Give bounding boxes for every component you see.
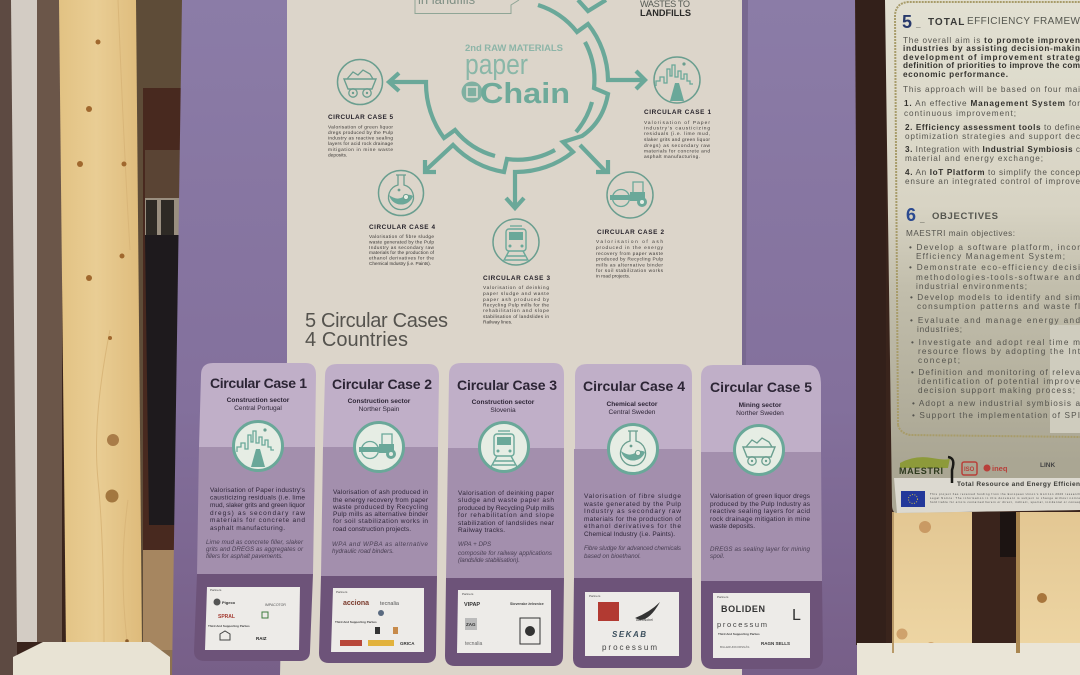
wastes to landfills label: [640, 0, 691, 18]
panel: circular case 4 card: Valorisation of fibre sludge: [584, 493, 681, 500]
central logo: 2nd raw materials paper chain: [462, 43, 570, 110]
panel: circular case 1 card: RAIZ: [256, 636, 267, 641]
panel: circular case 1 card: [194, 363, 316, 661]
circular case 5 node: [328, 60, 393, 158]
panel: circular case 5 card: BOLIDEN: [721, 604, 765, 614]
footer strap line and EU flag: Legal Notice: The information in this document is subject to change without notice: [930, 496, 1080, 500]
circular case 2 node: CIRCULAR CASE 2: [597, 229, 664, 236]
circular case 4 node: Chemical Industry (i.e. Paints).: [369, 261, 431, 267]
panel: circular case 3 card: stabilization of landslides near: [458, 520, 555, 527]
panel: circular case 1 card: asphalt manufacturing.: [210, 525, 285, 532]
circular case 5 node: layers for acid rock drainage: [328, 141, 393, 147]
poster central cream panel: [280, 0, 745, 675]
panel edge shadow: [742, 0, 748, 365]
circular case 3 node: Recycling Pulp mills for the: [483, 302, 549, 308]
framework text: 4. An IoT Platform to simplify the concep: [905, 168, 1080, 177]
circular case 2 node: mills as alternative binder: [596, 262, 663, 268]
circular case 5 node: dregs produced by the Pulp: [328, 130, 393, 136]
panel: circular case 4 card: based on bioethanol.: [584, 553, 641, 560]
objectives list: • Support the implementation of SPI: [912, 411, 1080, 420]
panel: circular case 4 card: Chemical Industry (i.e. Paints).: [584, 531, 675, 538]
panel: circular case 3 card: ZAG: [466, 622, 476, 627]
panel: circular case 5 card: reactive sealing layers for acid: [710, 508, 810, 515]
panel: circular case 1 card: Valorisation of Paper industry's: [210, 487, 306, 494]
circular case 3 node: Railway lines.: [483, 320, 512, 326]
footer strap line and EU flag: This project has received funding from the European Union's Horizon 2020 research: [930, 492, 1080, 496]
panel: circular case 1 card: SPRAL: [218, 614, 235, 620]
objectives list: methodologies-tools-software and: [916, 273, 1080, 282]
objectives list: [906, 229, 1080, 420]
panel: circular case 4 card: processum: [602, 643, 657, 652]
panel: circular case 3 card: Slovenia: [490, 407, 516, 414]
panel: circular case 5 card: Mining sector: [739, 402, 782, 409]
heading 5: _: [915, 20, 921, 29]
panel: circular case 1 card: Construction sector: [227, 397, 290, 404]
panel: circular case 5 card: Valorisation of green liquor dregs: [710, 493, 811, 500]
framework text: 2. Efficiency assessment tools to define: [905, 123, 1080, 132]
circular arrows diagram: [389, 0, 645, 208]
panel: circular case 2 card: Third And Supporting Parties: [335, 620, 377, 624]
panel: circular case 5 card: rock drainage mitigation in mine: [710, 516, 810, 523]
panel: circular case 2 card: Valorisation of ash produced in: [333, 489, 428, 496]
panel: circular case 5 card: Norther Sweden: [736, 410, 784, 417]
central logo: 2nd raw materials paper chain: paper: [465, 49, 528, 81]
partner logos: [899, 457, 1055, 483]
panel: circular case 3 card: tecnalia: [465, 641, 482, 647]
partner logos: ISO: [964, 467, 975, 473]
panel: circular case 2 card: road construction projects.: [333, 526, 411, 533]
central logo: 2nd raw materials paper chain: 2nd RAW MATERIALS: [465, 43, 563, 54]
circular case 1 node: asphalt manufacturing.: [644, 154, 700, 160]
heading 5: [902, 12, 1080, 32]
panel: circular case 4 card: [573, 364, 692, 668]
panel: circular case 3 card: produced by Recycling Pulp mills: [458, 505, 555, 512]
heading 5: EFFICIENCY FRAMEW: [967, 16, 1080, 27]
panel: circular case 3 card: Circular Case 3: [457, 377, 557, 393]
objectives list: • Develop a software platform, incor: [909, 243, 1080, 252]
panel: circular case 3 card: Valorisation of deinking paper: [458, 490, 555, 497]
heading: 5 circular cases 4 countries: [305, 310, 448, 351]
panel: circular case 3 card: Slovenske železnice: [510, 602, 544, 606]
panel: circular case 3 card: VIPAP: [464, 602, 480, 608]
panel: circular case 3 card: for rehabilitation and slope: [458, 512, 554, 519]
objectives list: • Demonstrate eco-efficiency decisi: [909, 263, 1080, 272]
panel: circular case 4 card: Chemical sector: [607, 401, 658, 408]
framework text: material and energy exchange;: [905, 154, 1043, 163]
panel: circular case 2 card: WPA and WPBA as alternative: [332, 541, 429, 548]
circular case 3 node: CIRCULAR CASE 3: [483, 275, 550, 282]
circular case 1 node: [644, 57, 711, 160]
circular case 4 node: ethanol derivatives for the: [369, 256, 434, 262]
wooden beam, left: [59, 0, 142, 649]
framework text: [903, 36, 1080, 186]
framework text: development of improvement strateg: [903, 53, 1080, 62]
panel: circular case 4 card: waste generated by the Pulp: [583, 501, 681, 508]
panel: circular case 5 card: Circular Case 5: [710, 379, 812, 395]
panel: circular case 4 card: Fibre sludge for advanced chemicals: [584, 545, 681, 552]
circular case 1 node: industry's causticizing: [644, 126, 710, 132]
circular case 4 node: CIRCULAR CASE 4: [369, 224, 435, 231]
objectives list: • Investigate and adopt real time m: [911, 338, 1080, 347]
circular case 5 node: Valorisation of green liquor: [328, 124, 393, 130]
circular case 4 node: waste generated by the Pulp: [369, 240, 434, 246]
circular case 5 node: mitigation in mine waste: [328, 147, 393, 153]
heading: 5 circular cases 4 countries: 4 Countries: [305, 329, 408, 351]
panel: circular case 2 card: GRICA: [400, 641, 415, 646]
panel: circular case 1 card: Lime mud as concrete filler, slaker: [206, 539, 304, 546]
panel: circular case 1 card: causticizing residuals (i.e. lime: [210, 494, 305, 502]
objectives list: • Develop models to identify and sim: [910, 293, 1080, 302]
heading 6: 6: [906, 205, 916, 225]
circular case 1 node: materials for concrete and: [644, 148, 710, 154]
panel: circular case 1 card: Pigeco: [222, 600, 236, 605]
objectives list: • Definition and monitoring of releva: [911, 368, 1080, 377]
circular case 2 node: produced in the energy: [596, 245, 664, 251]
panel: circular case 2 card: the energy recovery from paper: [333, 497, 429, 504]
framework text: This approach will be based on four mai: [903, 85, 1080, 94]
panel: circular case 3 card: (landslide stabilisation).: [458, 557, 520, 564]
panel: circular case 5 card: [701, 365, 823, 669]
panel: circular case 5 card: processum: [717, 620, 767, 629]
circular case 5 node: industry as reactive sealing: [328, 136, 393, 142]
wastes to landfills label: LANDFILLS: [640, 8, 691, 18]
panel: circular case 1 card: Partners: [210, 588, 222, 592]
panel: circular case 4 card: AkzoNobel: [636, 618, 653, 622]
panel: circular case 1 card: Third And Supporting Parties: [208, 624, 250, 628]
panel: circular case 5 card: spoil.: [710, 553, 724, 560]
framework text: industries by assisting decision-makin: [903, 44, 1080, 53]
panel: circular case 2 card: for soil stabilization works in: [333, 518, 428, 525]
panel: circular case 2 card: Circular Case 2: [332, 376, 432, 392]
objectives list: Efficiency Management System;: [916, 252, 1065, 261]
objectives list: MAESTRI main objectives:: [906, 229, 1015, 238]
panel: right poster total efficiency framework: [885, 0, 1080, 513]
panel: circular case 2 card: Construction sector: [348, 398, 411, 405]
heading 5: TOTAL: [928, 17, 965, 28]
panel: circular case 1 card: materials for concrete and: [210, 517, 305, 524]
panel: circular case 5 card: Partners: [717, 595, 729, 599]
panel: circular case 2 card: Pulp mills as alternative binder: [333, 511, 429, 518]
panel: circular case 3 card: Railway tracks.: [458, 527, 505, 534]
heading 6: [906, 205, 998, 225]
heading 5: 5: [902, 12, 912, 32]
objectives list: industries;: [917, 325, 962, 334]
circular case 3 node: paper ash produced by: [483, 297, 550, 303]
panel: circular case 3 card: Partners: [462, 592, 474, 596]
heading: 5 circular cases 4 countries: 5 Circular Cases: [305, 310, 448, 332]
panel: circular case 4 card: Industry as secondary raw: [584, 508, 681, 515]
circular case 2 node: Valorisation of ash: [596, 239, 663, 245]
circular case 1 node: Valorisation of Paper: [644, 120, 710, 126]
panel: circular case 1 card: fillers for asphalt pavements.: [206, 553, 283, 560]
partner logos: MAESTRI: [899, 466, 943, 476]
footer strap line and EU flag: [901, 481, 1080, 507]
circular case 4 node: Valorisation of fibre sludge: [369, 234, 434, 240]
panel: circular case 2 card: Partners: [336, 590, 348, 594]
footer strap line and EU flag: hold liable for errors contained herein or direct, indirect, special, incidental or conseq: [930, 500, 1080, 504]
panel: circular case 1 card: grits and DREGS as aggregates or: [206, 546, 304, 553]
panel: circular case 5 card: produced by the Pulp Industry as: [710, 501, 811, 508]
circular case 1 node: slaker grits and green liquor: [644, 137, 710, 143]
panel: circular case 3 card: [445, 363, 564, 666]
panel: circular case 5 card: RAGN SELLS: [761, 641, 790, 646]
framework text: optimization strategies and support dec: [905, 132, 1080, 141]
panel: circular case 2 card: waste produced by Recycling: [332, 504, 428, 511]
framework text: continuous improvement;: [904, 109, 1016, 118]
objectives list: identification of potential improve: [918, 377, 1080, 386]
panel: circular case 2 card: [319, 364, 439, 663]
framework text: definition of priorities to improve the com: [903, 61, 1080, 70]
heading 6: _: [919, 215, 925, 224]
panel: circular case 3 card: Construction sector: [472, 399, 535, 406]
circular case 3 node: paper sludge and waste: [483, 291, 549, 297]
circular case 1 node: CIRCULAR CASE 1: [644, 109, 711, 116]
panel: circular case 5 card: DREGS as sealing layer for mining: [710, 546, 811, 553]
panel: circular case 3 card: sludge and waste paper ash: [458, 497, 554, 504]
circular case 2 node: in road projects.: [596, 274, 630, 280]
objectives list: consumption patterns and waste fl: [917, 302, 1080, 311]
white base block, left: [13, 642, 170, 675]
framework text: 3. Integration with Industrial Symbiosis c: [905, 145, 1080, 154]
panel: circular case 4 card: Central Sweden: [609, 409, 656, 416]
heading 6: OBJECTIVES: [932, 211, 998, 222]
panel: circular case 1 card: mud, slaker grits and green liquor: [210, 502, 306, 509]
panel: circular case 2 card: acciona: [343, 600, 369, 607]
partner logos: ineq: [992, 464, 1008, 473]
circular case 4 node: [369, 170, 435, 267]
objectives list: industrial environments;: [916, 282, 1027, 291]
objectives list: concept;: [918, 356, 960, 365]
panel: circular case 5 card: waste deposits.: [709, 523, 755, 530]
circular case 5 node: CIRCULAR CASE 5: [328, 114, 393, 121]
panel: circular case 1 card: Circular Case 1: [210, 375, 307, 391]
framework text: economic performance.: [903, 70, 1008, 79]
panel: circular case 3 card: WPA + DPS: [458, 541, 492, 548]
panel: circular case 5 card: BILLERUDKORSNÄS: [720, 645, 749, 649]
panel: circular case 4 card: materials for the production of: [584, 516, 681, 523]
panel: circular case 1 card: IMPACOTOR: [265, 603, 286, 607]
circular case 2 node: produced by Recycling Pulp: [596, 256, 663, 262]
objectives list: • Evaluate and manage energy and: [910, 316, 1080, 325]
panel: circular case 5 card: Third And Supporting Parties: [718, 632, 760, 636]
objectives list: resource flows by adopting the Int: [918, 347, 1080, 356]
panel: circular case 2 card: Norther Spain: [359, 406, 400, 413]
partner logos: LINK: [1040, 462, 1055, 469]
panel: circular case 2 card: hydraulic road binders.: [332, 548, 394, 555]
circular case 1 node: dregs) as secondary raw: [644, 143, 711, 149]
poster background purple: [172, 0, 859, 675]
panel: circular case 3 card: composite for railway applications: [458, 550, 552, 557]
panel: circular case 4 card: Circular Case 4: [583, 378, 685, 394]
objectives list: decision support making process;: [918, 386, 1075, 395]
footer strap line and EU flag: Total Resource and Energy Efficien: [957, 481, 1080, 488]
circular case 5 node: deposits.: [328, 152, 347, 158]
circular case 3 node: Valorisation of deinking: [483, 285, 549, 291]
circular case 4 node: materials for the production of: [369, 250, 435, 256]
circular case 3 node: [483, 219, 550, 326]
circular case 4 node: Industry as secondary raw: [369, 245, 435, 251]
panel: circular case 4 card: SEKAB: [612, 630, 646, 639]
circular case 2 node: recovery from paper waste: [596, 251, 663, 257]
panel: circular case 1 card: dregs) as secondary raw: [210, 510, 305, 517]
panel: circular case 1 card: Central Portugal: [234, 405, 282, 412]
framework text: 1. An effective Management System for: [904, 99, 1080, 108]
panel: circular case 2 card: tecnalia: [380, 601, 400, 607]
panel: circular case 4 card: Partners: [589, 594, 601, 598]
panel: circular case 4 card: ethanol derivatives for the: [584, 523, 681, 530]
circular case 2 node: for soil stabilization works: [596, 268, 664, 274]
circular case 2 node: [596, 172, 664, 280]
circular case 1 node: residuals (i.e. lime mud,: [644, 131, 710, 137]
circular case 3 node: rehabilitation and slope: [483, 308, 549, 314]
framework text: ensure an integrated control of improve: [905, 177, 1080, 186]
central logo: 2nd raw materials paper chain: Chain: [480, 78, 570, 110]
objectives list: • Adopt a new industrial symbiosis a: [912, 399, 1080, 408]
panel: circular case 5 card: L: [792, 607, 801, 624]
framework text: The overall aim is to promote improven: [903, 36, 1080, 45]
wooden posts and floor, right: [856, 0, 1080, 675]
circular case 3 node: stabilisation of landslides in: [483, 314, 549, 320]
cut off callout: in landfills: [415, 0, 519, 14]
